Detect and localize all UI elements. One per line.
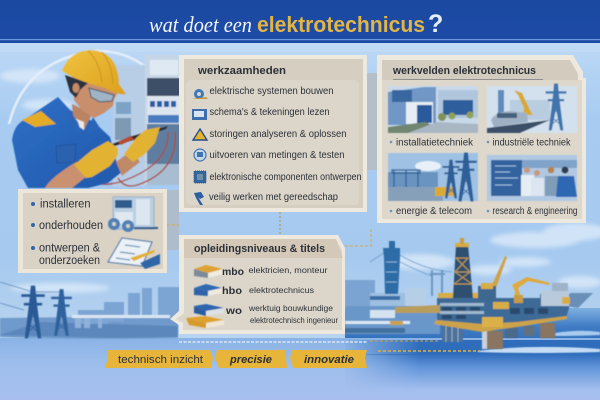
header band: [0, 0, 600, 52]
left tower: [383, 241, 400, 294]
icon: meter: [194, 149, 206, 161]
badge: precisie: [215, 350, 287, 368]
neck and shirt: [72, 104, 92, 130]
title highlight: elektrotechnicus: [257, 12, 425, 37]
list: taken: onderzoeken: [39, 255, 100, 267]
icon: boek mbo: [194, 265, 223, 278]
badge: precisie: precisie: [229, 354, 272, 366]
list: taken: onderhouden: [39, 220, 103, 232]
tile: energie & telecom: energie & telecom: [396, 206, 472, 217]
row: wo: wo: [225, 305, 242, 317]
icon: boeken wo: [186, 304, 224, 328]
row: wo: [186, 303, 338, 328]
dashed connector lines: [167, 212, 480, 351]
icon: boek hbo: [194, 284, 222, 296]
icon: meetkast: [108, 197, 158, 232]
row: hbo: [194, 284, 314, 297]
panel: werkvelden elektrotechnicus: [377, 55, 586, 223]
heading: werkvelden: werkvelden elektrotechnicus: [392, 65, 536, 77]
icon: gereedschap: [194, 192, 204, 205]
wires: [95, 132, 175, 186]
list: taken: installeren: [40, 198, 90, 210]
left landscape: pylons and city: [0, 282, 180, 339]
hair: [65, 75, 88, 98]
icon: waarschuwing: [193, 129, 207, 140]
worker illustration: [9, 50, 180, 188]
heading: opleidingsniveaus: opleidingsniveaus & titels: [194, 243, 325, 255]
derrick: [453, 238, 473, 298]
badge: technisch inzicht: [105, 350, 213, 368]
cranes: [478, 256, 550, 303]
tile: industriele techniek: [487, 84, 577, 148]
row: wo: werktuig bouwkundige: [248, 303, 333, 313]
heading: werkzaamheden: werkzaamheden: [197, 65, 286, 77]
row: mbo: elektricien, monteur: [248, 265, 328, 275]
legs: [442, 323, 555, 349]
tile: installatietechniek: installatietechniek: [396, 138, 474, 148]
tile: industriele techniek: industriële techniek: [492, 138, 571, 148]
tile: energie & telecom: [388, 153, 478, 217]
icon: schema: [192, 109, 207, 120]
background: sky: [0, 43, 600, 343]
ear: [72, 83, 80, 93]
city behind platform: [345, 252, 452, 334]
row: wo: elektrotechnisch ingenieur: [250, 315, 338, 325]
tile: installatietechniek: [388, 86, 478, 148]
row: mbo: [194, 265, 328, 278]
chest pocket: [56, 144, 76, 163]
shoulder patch: [22, 111, 56, 127]
list: werkzaamheden: elektronische componenten ontwerpen: [210, 172, 362, 183]
helmet: [62, 50, 126, 94]
row: mbo: mbo: [222, 266, 244, 278]
right glove: [124, 127, 160, 162]
list: werkzaamheden: elektrische systemen bouwen: [210, 86, 334, 97]
list: werkzaamheden: schema's & tekeningen lezen: [210, 107, 330, 118]
icon: tandwiel: [190, 89, 208, 99]
torso: [12, 97, 122, 188]
badge: technisch inzicht: technisch inzicht: [118, 354, 203, 366]
list: werkzaamheden: uitvoeren van metingen & testen: [210, 150, 344, 161]
panel: opleidingsniveaus & titels: [170, 235, 345, 334]
probe: [112, 126, 168, 146]
white arc: [9, 51, 155, 124]
forearm: [45, 162, 92, 188]
face: [72, 76, 119, 118]
row: hbo: hbo: [222, 285, 242, 297]
list: taken: [31, 198, 103, 267]
list: werkzaamheden: storingen analyseren & oplossen: [210, 129, 346, 140]
goggles: [89, 88, 114, 102]
oil platform: [345, 238, 593, 349]
icon: chip: [194, 171, 206, 183]
badge: innovatie: [290, 350, 367, 368]
list: werkzaamheden: veilig werken met gereedschap: [209, 192, 338, 203]
badge: innovatie: innovatie: [304, 354, 354, 366]
deck: [395, 283, 593, 332]
panel: taken links: [18, 189, 167, 273]
list: werkzaamheden: [190, 86, 362, 205]
left glove: [74, 141, 118, 178]
panel: werkzaamheden: [179, 55, 367, 212]
icon: ontwerp tablet: [108, 238, 160, 269]
tile: research & engineering: [487, 155, 578, 217]
background: sea and lower band: [0, 308, 600, 400]
title question mark: ?: [428, 10, 443, 38]
list: taken: ontwerpen &: [39, 242, 100, 254]
collar: [66, 106, 100, 138]
background cabinets: [113, 55, 180, 187]
row: hbo: elektrotechnicus: [249, 285, 314, 295]
title: wat doet een: [149, 12, 252, 37]
tile: research & engineering: research & engineering: [492, 206, 578, 217]
